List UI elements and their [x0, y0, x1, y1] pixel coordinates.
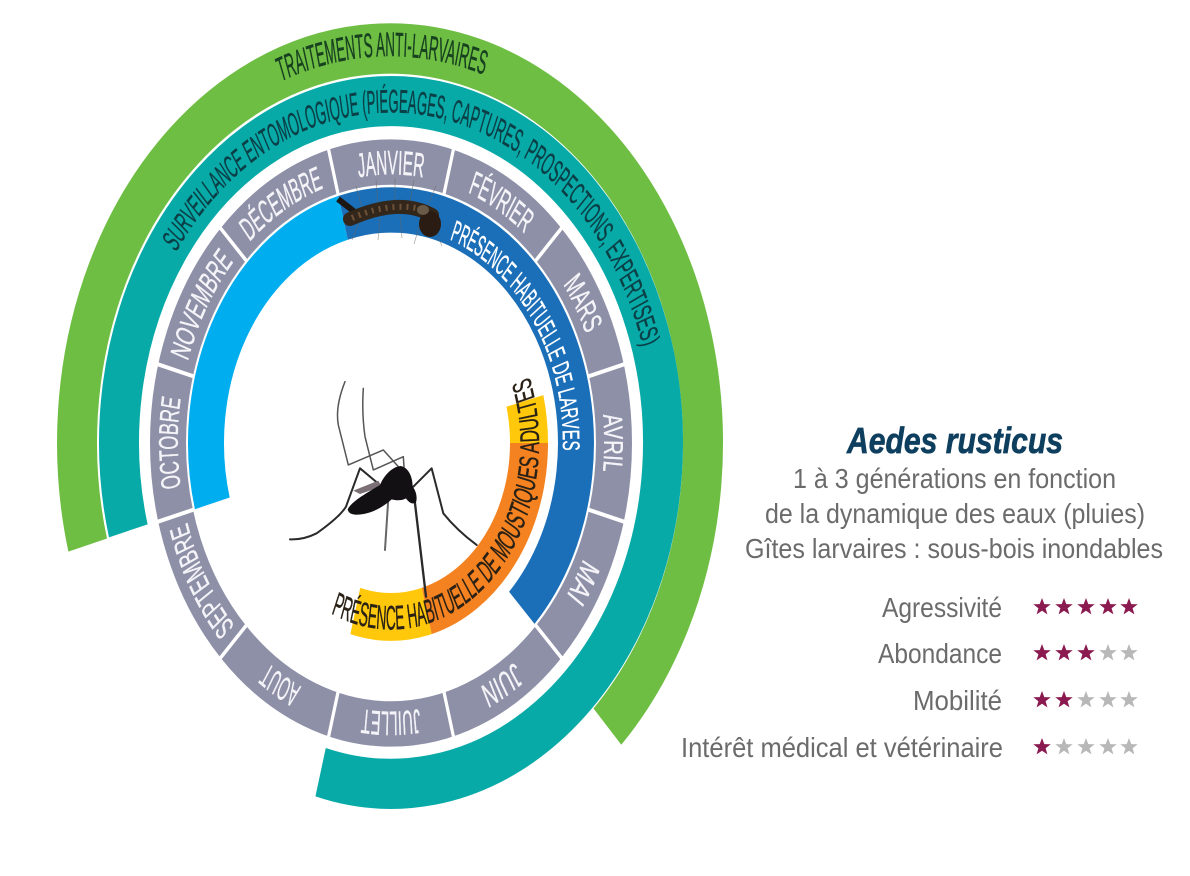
rating: mobilité: Mobilité [913, 685, 1002, 716]
ring: months: DÉCEMBRE [238, 166, 323, 241]
ring: traitements anti-larvaires: TRAITEMENTS ANTI-LARVAIRES [274, 32, 488, 80]
rating: agressivité [882, 592, 1138, 623]
ring: months: MAI [567, 560, 600, 607]
ring: months: OCTOBRE [158, 396, 181, 489]
icon: mosquito [290, 382, 477, 597]
rating: abondance: Abondance [878, 638, 1002, 669]
ring: presence of larvae [188, 187, 594, 624]
ring: presence of larvae: PRÉSENCE HABITUELLE DE LARVES [450, 220, 580, 450]
ring: months: FÉVRIER [468, 171, 534, 234]
ring: months: NOVEMBRE [170, 248, 234, 360]
rating: agressivité: Agressivité [882, 592, 1002, 623]
ring: months: JANVIER [358, 150, 424, 178]
rating: mobilité [913, 685, 1138, 716]
ring: months: AOUT [258, 665, 302, 706]
rating: abondance [878, 638, 1138, 669]
ring: presence of adult mosquitoes: PRÉSENCE HABITUELLE DE MOUSTIQUES ADULTES [332, 378, 540, 630]
description text: de la dynamique des eaux (pluies) [765, 498, 1145, 529]
icon: larva [338, 178, 442, 246]
ring: months: JUIN [481, 664, 522, 708]
panel: species information [681, 420, 1163, 763]
ring: months: MARS [564, 272, 602, 332]
ring: months: SEPTEMBRE [170, 522, 233, 639]
circular calendar [57, 23, 724, 809]
rating: intérêt médical et vétérinaire: Intérêt médical et vétérinaire [681, 732, 1003, 763]
description text: 1 à 3 générations en fonction [793, 463, 1116, 494]
description text [745, 463, 1163, 564]
ring: months [150, 139, 632, 747]
title: Aedes rusticus [846, 420, 1063, 461]
ring: months: JUILLET [360, 709, 420, 736]
ring: surveillance entomologique: SURVEILLANCE ENTOMOLOGIQUE (PIÉGEAGES, CAPTURES, PROSPECTIONS, EXPERTISES) [163, 84, 660, 346]
ring: months: AVRIL [602, 414, 623, 471]
